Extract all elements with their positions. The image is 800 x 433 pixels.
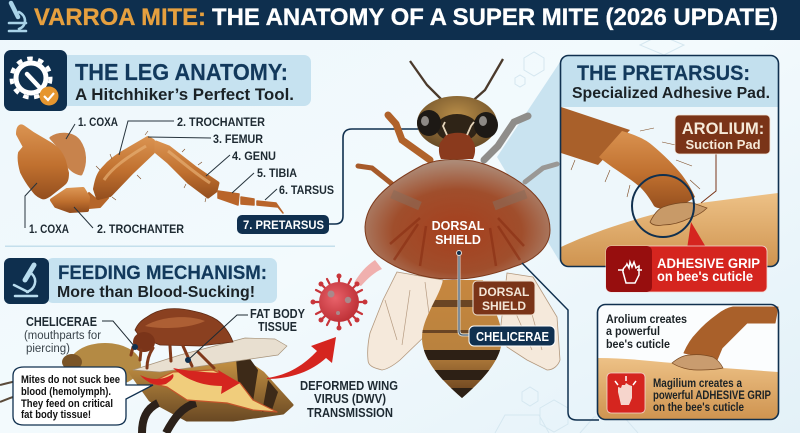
- label: arolium: Suction Pad: [685, 137, 761, 152]
- leg segments: [561, 107, 630, 165]
- leader: arolium: [701, 154, 716, 203]
- text: DWV transmission: TRANSMISSION: [307, 406, 393, 420]
- text: DWV transmission: DEFORMED WING: [300, 379, 398, 393]
- arrow: pink path to shield: [354, 260, 382, 286]
- illustration: bee side view with mite: [0, 309, 292, 433]
- panel: leg anatomy heading: [4, 50, 311, 111]
- illustration: bee with mite from above: [358, 59, 560, 400]
- callout: feeding fact: [13, 367, 153, 425]
- explanation text: on the bee's cuticle: [653, 402, 744, 414]
- callout: feeding fact: blood (hemolymph).: [21, 386, 111, 398]
- leg part labels: 2. TROCHANTER: [177, 117, 266, 129]
- mite head: [439, 133, 475, 159]
- panel: feeding mechanism heading: [4, 258, 277, 304]
- front coxa: [18, 126, 67, 197]
- label: dorsal shield: [473, 281, 535, 315]
- callout: feeding fact: Mites do not suck bee: [21, 374, 120, 386]
- icon: gear and wrench: [4, 50, 67, 111]
- callout: feeding fact: They feed on critical: [21, 398, 113, 410]
- explanation text: bee's cuticle: [606, 339, 670, 351]
- highlight: [104, 146, 210, 183]
- shield veining: [390, 218, 524, 266]
- label: chelicerae: CHELICERAE: [26, 315, 97, 329]
- panel: leg anatomy heading: A Hitchhiker’s Perfect Tool.: [75, 86, 294, 104]
- adhesive pad: [650, 203, 707, 225]
- genu: [156, 142, 218, 197]
- wings: [368, 272, 443, 370]
- text: DWV transmission: [300, 379, 398, 420]
- pointer: grip: [687, 222, 707, 249]
- panel: pretarsus: Specialized Adhesive Pad.: [572, 85, 770, 102]
- label: arolium: [675, 115, 770, 154]
- label: fat body tissue: [185, 307, 306, 363]
- explanation text: Arolium creates: [606, 314, 687, 326]
- leg part labels: 3. FEMUR: [213, 134, 264, 146]
- callout: feeding fact: fat body tissue!: [21, 409, 91, 421]
- heading: FEEDING MECHANISM:: [58, 262, 267, 284]
- panel: pretarsus: [560, 55, 779, 292]
- background hexagons: [495, 35, 764, 433]
- adhesive grip badge: on bee's cuticle: [657, 269, 753, 284]
- adhesive grip badge: ADHESIVE GRIP: [657, 256, 760, 271]
- leg part labels: [29, 117, 334, 236]
- explanation text: a powerful: [606, 326, 660, 338]
- femur: [95, 138, 153, 198]
- label: chelicerae: CHELICERAE: [476, 330, 549, 344]
- label: chelicerae: piercing): [26, 343, 70, 355]
- shield label: DORSAL: [432, 219, 485, 233]
- leg part labels: 4. GENU: [232, 151, 276, 163]
- title: VARROA MITE:: [34, 4, 206, 31]
- panel: pretarsus: THE PRETARSUS:: [577, 62, 750, 85]
- back coxa: [51, 134, 85, 174]
- leg part labels: 2. TROCHANTER: [97, 224, 185, 236]
- label: 7. pretarsus with connector: 7. PRETARSUS: [243, 218, 324, 232]
- heading: THE LEG ANATOMY:: [75, 59, 288, 85]
- trochanter: [52, 189, 88, 211]
- dorsal shield: [365, 159, 550, 279]
- leg part labels: 6. TARSUS: [279, 185, 334, 197]
- label: dorsal shield: DORSAL: [479, 285, 529, 299]
- explanation text: [606, 314, 771, 414]
- leg hairs: [571, 128, 700, 197]
- panel: feeding mechanism heading: More than Blood-Sucking!: [57, 284, 255, 301]
- header bar: [0, 0, 800, 40]
- connector: shield to lower panel: [522, 263, 599, 420]
- bee cuticle: [561, 193, 778, 266]
- adhesive grip badge: [606, 246, 767, 292]
- wedge: zoom beam to pretarsus: [497, 62, 560, 262]
- label: chelicerae: [469, 326, 555, 346]
- joint: [89, 193, 108, 208]
- mite head and legs: [131, 332, 214, 368]
- tibia and tarsus: [218, 191, 283, 213]
- panel header: [561, 56, 778, 107]
- label: arolium: AROLIUM:: [682, 120, 764, 138]
- cuticle band: [598, 358, 778, 419]
- label: dorsal shield: SHIELD: [482, 299, 526, 313]
- icon: virus: [310, 274, 368, 330]
- label: fat body tissue: TISSUE: [258, 320, 297, 334]
- bee legs: [358, 115, 557, 184]
- magnifier circle: [632, 175, 694, 237]
- explanation text: Magilium creates a: [653, 378, 743, 390]
- panel outline: [560, 56, 778, 266]
- label: chelicerae: [24, 315, 138, 355]
- leg leader lines: [25, 121, 277, 228]
- leg part labels: 1. COXA: [29, 224, 69, 236]
- leg illustration: [18, 126, 283, 213]
- leg part labels: 1. COXA: [78, 117, 118, 129]
- shield label: SHIELD: [435, 233, 481, 247]
- small leg: [684, 307, 778, 360]
- abdomen: [420, 278, 504, 400]
- leg hairs: [96, 131, 206, 202]
- label: fat body tissue: FAT BODY: [250, 307, 306, 321]
- mite body: [135, 309, 233, 346]
- fat body tissue: [150, 370, 277, 412]
- wing: [133, 338, 287, 372]
- arrow: virus transmission: [267, 337, 336, 379]
- icon: microscope: [4, 258, 49, 304]
- red feeding arrow: [140, 368, 240, 394]
- text: DWV transmission: VIRUS (DWV): [314, 392, 386, 406]
- header bar: THE ANATOMY OF A SUPER MITE (2026 UPDATE): [212, 4, 778, 31]
- panel outline: [598, 304, 778, 420]
- icon: gripping hand: [607, 373, 645, 413]
- connector: chelicerae: [456, 250, 471, 335]
- icon: microscope: [9, 3, 26, 31]
- head: [417, 96, 497, 150]
- panel: arolium explanation: [597, 304, 779, 420]
- leg part labels: 5. TIBIA: [257, 168, 297, 180]
- explanation text: powerful ADHESIVE GRIP: [653, 390, 771, 402]
- label: 7. pretarsus with connector: [237, 129, 444, 234]
- antennae: [410, 59, 503, 105]
- label: chelicerae: (mouthparts for: [24, 330, 101, 342]
- shield label: [432, 219, 485, 247]
